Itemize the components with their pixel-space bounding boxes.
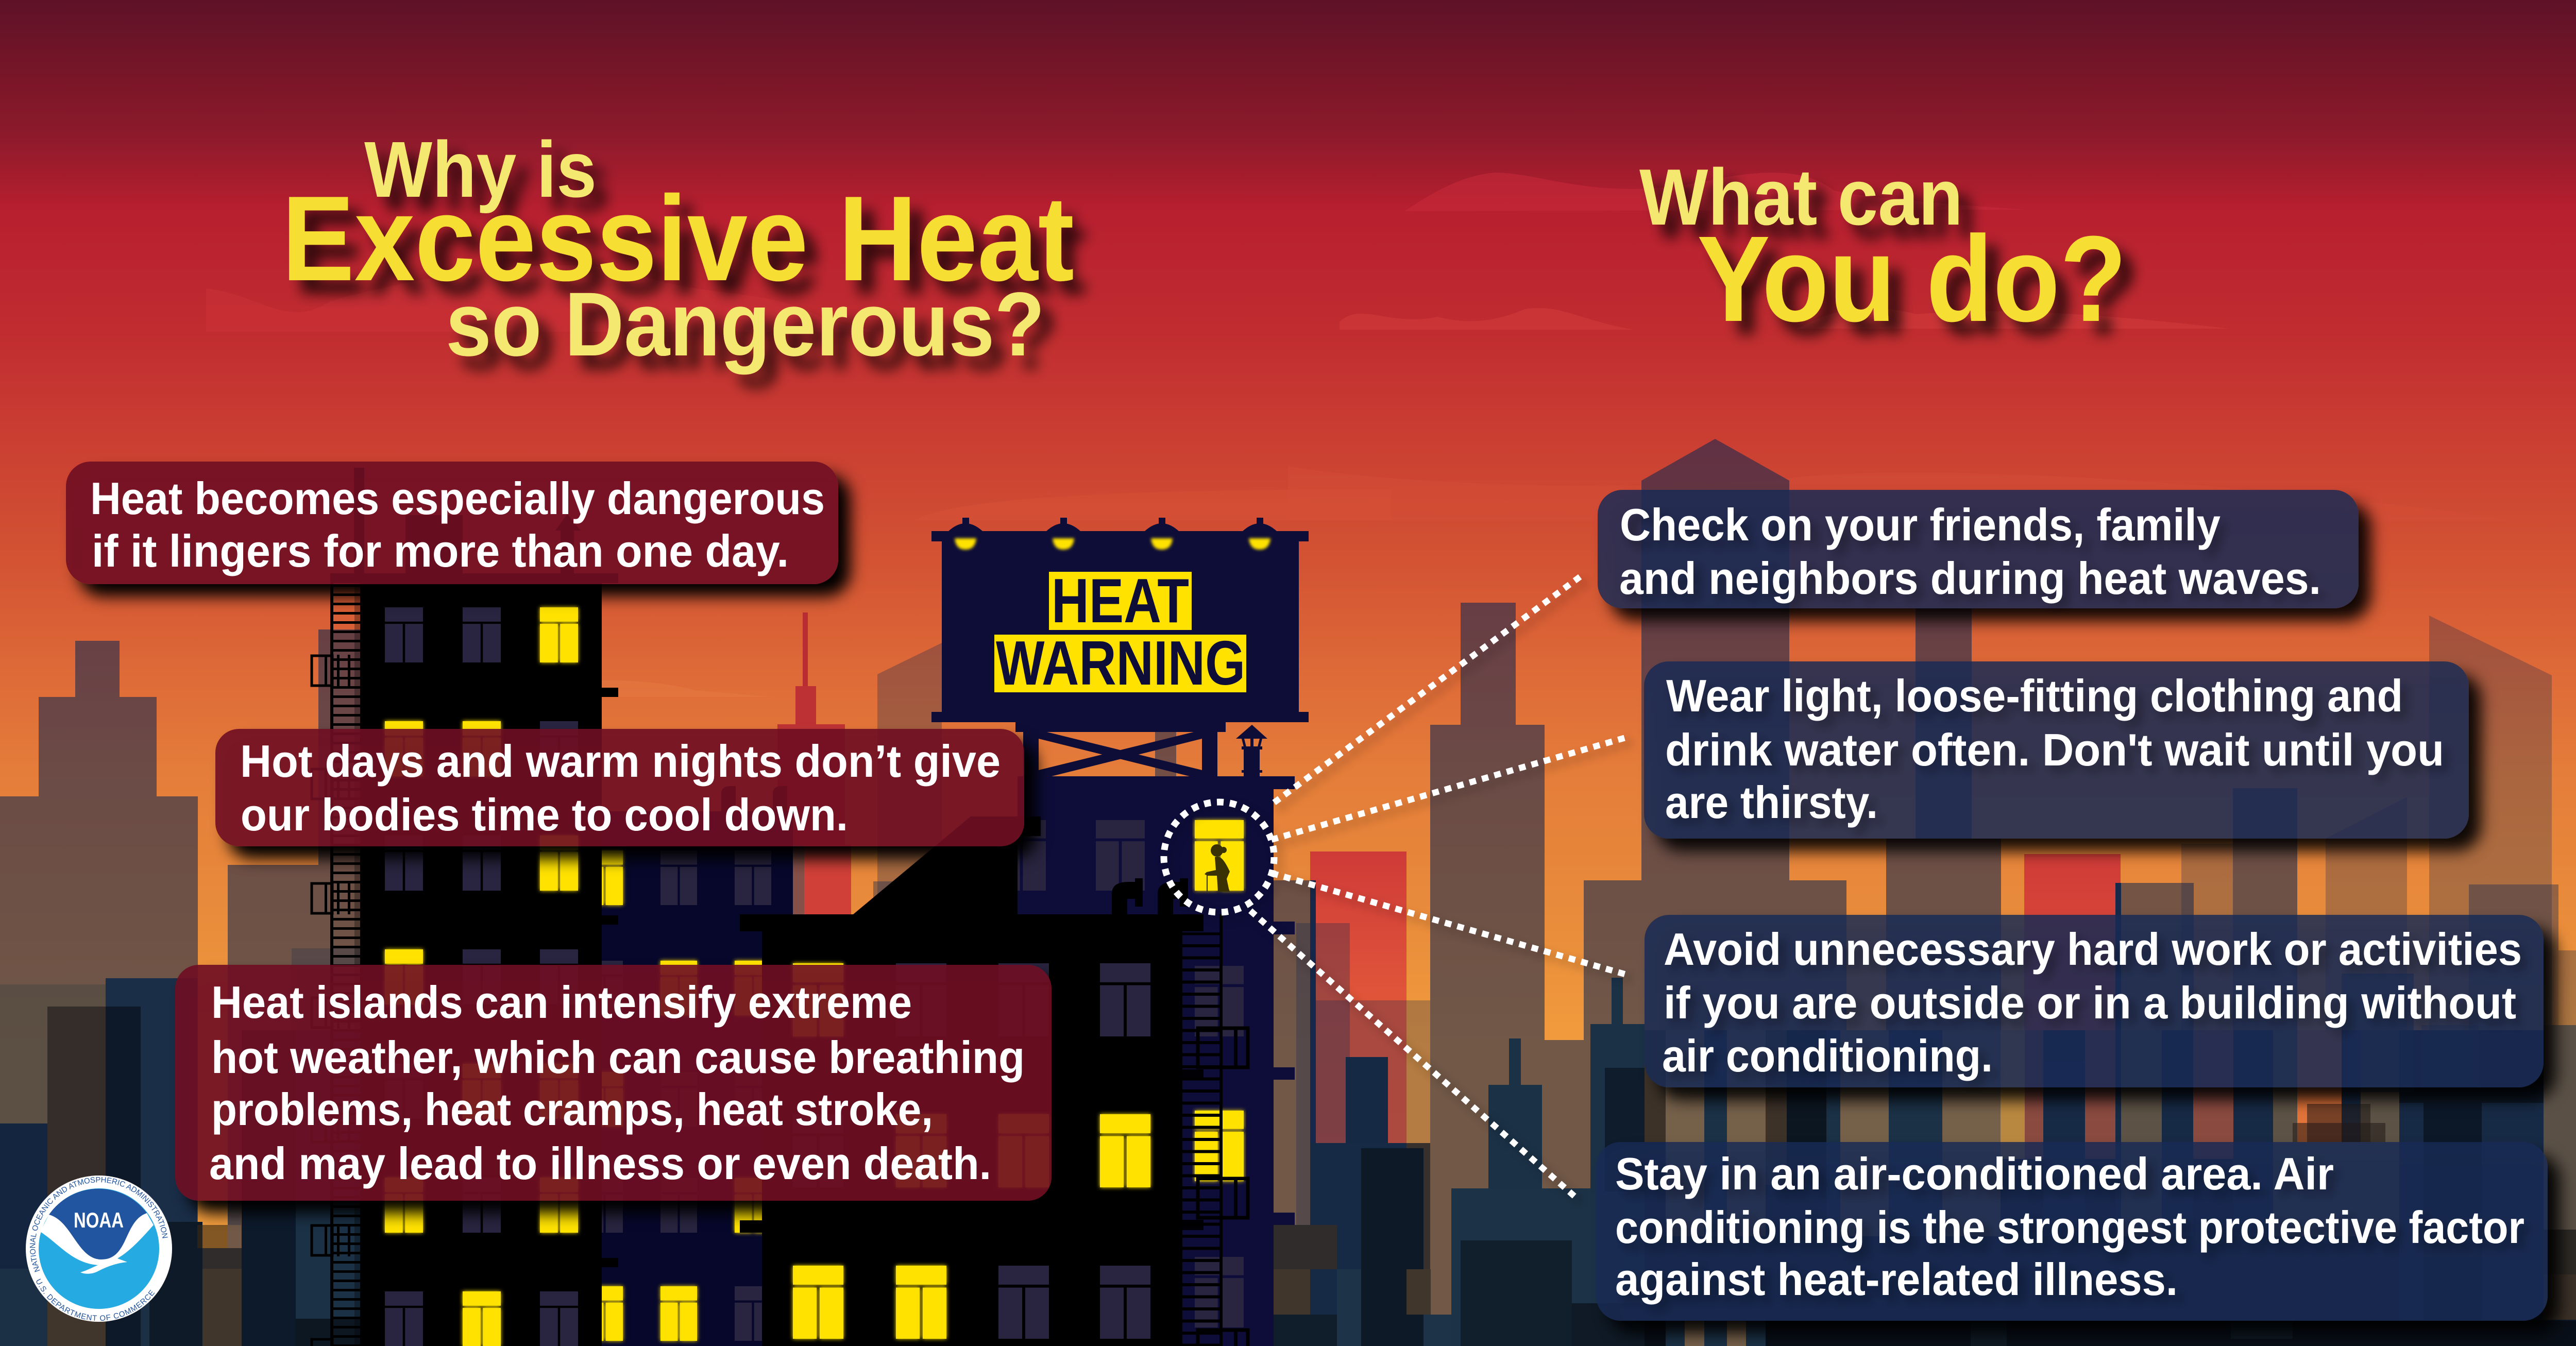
fire escape left <box>312 573 360 1346</box>
panel: stay in air conditioning callout: Stay in an air-conditioned area. Air <box>1615 1148 2334 1199</box>
far skyline right <box>1274 439 2297 1346</box>
icon: rooftop vent <box>1236 725 1267 776</box>
black building left <box>330 573 618 1346</box>
panel: check on friends callout <box>1598 490 2359 608</box>
panel: hot days callout <box>215 729 1024 846</box>
panel: heat islands callout: and may lead to illness or even death. <box>209 1138 991 1189</box>
red buildings <box>1310 851 2121 1215</box>
billboard <box>931 518 1309 776</box>
panel: wear light clothing callout <box>1644 661 2469 839</box>
rooftop structures behind first callout <box>354 468 581 574</box>
panel: hot days callout: our bodies time to cool down. <box>241 789 848 840</box>
panel: heat lingers callout <box>66 462 838 584</box>
panel: check on friends callout: Check on your friends, family <box>1620 499 2221 550</box>
panel: avoid hard work callout <box>1645 915 2544 1087</box>
panel: stay in air conditioning callout: against heat-related illness. <box>1615 1254 2178 1305</box>
panel: heat islands callout <box>175 965 1052 1201</box>
panel: avoid hard work callout: if you are outside or in a building without <box>1664 977 2516 1028</box>
icon: billboard lamps <box>948 518 1277 532</box>
panel: wear light clothing callout: drink water often. Don't wait until you <box>1665 724 2444 775</box>
heading: why is excessive heat so dangerous <box>282 125 1074 375</box>
heading: why is excessive heat so dangerous: Why is <box>364 125 597 214</box>
heat warning sign: HEAT <box>1052 566 1189 636</box>
panel: hot days callout: Hot days and warm nights don’t give <box>240 736 1001 787</box>
panel: check on friends callout: and neighbors during heat waves. <box>1619 553 2321 604</box>
navy building left <box>586 786 793 1346</box>
heading: why is excessive heat so dangerous: Excessive Heat <box>282 171 1074 306</box>
lower skyline band behind right callouts <box>1645 974 2576 1346</box>
panel: avoid hard work callout: Avoid unnecessary hard work or activities <box>1664 924 2522 975</box>
icon: person with cane in the window <box>1205 844 1230 892</box>
near skyline right <box>1274 978 1675 1346</box>
heading: what can you do: What can <box>1639 152 1963 242</box>
heat warning sign <box>994 566 1246 698</box>
fire escape right <box>1182 914 1248 1346</box>
far skyline left <box>0 629 360 1346</box>
heading: what can you do <box>1639 152 2127 347</box>
panel: heat lingers callout: if it lingers for more than one day. <box>92 525 789 576</box>
icon: NOAA logo: NOAA <box>74 1208 124 1232</box>
clouds <box>206 173 2514 697</box>
heading: what can you do: You do? <box>1697 211 2127 347</box>
icon: NOAA logo <box>26 1175 172 1322</box>
panel: heat islands callout: Heat islands can intensify extreme <box>211 977 912 1028</box>
heading: why is excessive heat so dangerous: so Dangerous? <box>446 274 1045 375</box>
panel: heat islands callout: hot weather, which can cause breathing <box>211 1032 1025 1083</box>
navy building under billboard <box>997 776 1295 1346</box>
panel: wear light clothing callout: are thirsty. <box>1665 777 1878 828</box>
panel: avoid hard work callout: air conditioning. <box>1662 1030 1993 1081</box>
icon: NOAA logo: NATIONAL OCEANIC AND ATMOSPHERIC ADMINISTRATION <box>26 1177 171 1272</box>
dotted callout lines and circle <box>1164 576 1629 1197</box>
black building right <box>740 816 1204 1346</box>
icon: NOAA logo: U.S. DEPARTMENT OF COMMERCE <box>36 1279 155 1321</box>
mid skyline right <box>1296 616 2576 1346</box>
panel: stay in air conditioning callout: conditioning is the strongest protective factor <box>1615 1202 2524 1253</box>
panel: wear light clothing callout: Wear light, loose-fitting clothing and <box>1666 670 2403 721</box>
panel: heat lingers callout: Heat becomes especially dangerous <box>90 473 825 524</box>
heat warning sign: WARNING <box>996 628 1245 698</box>
icon: lamp glow <box>955 538 1270 550</box>
center background buildings <box>777 612 1176 927</box>
panel: heat islands callout: problems, heat cramps, heat stroke, <box>211 1084 933 1135</box>
mid skyline left <box>0 948 360 1346</box>
panel: stay in air conditioning callout <box>1596 1142 2548 1321</box>
